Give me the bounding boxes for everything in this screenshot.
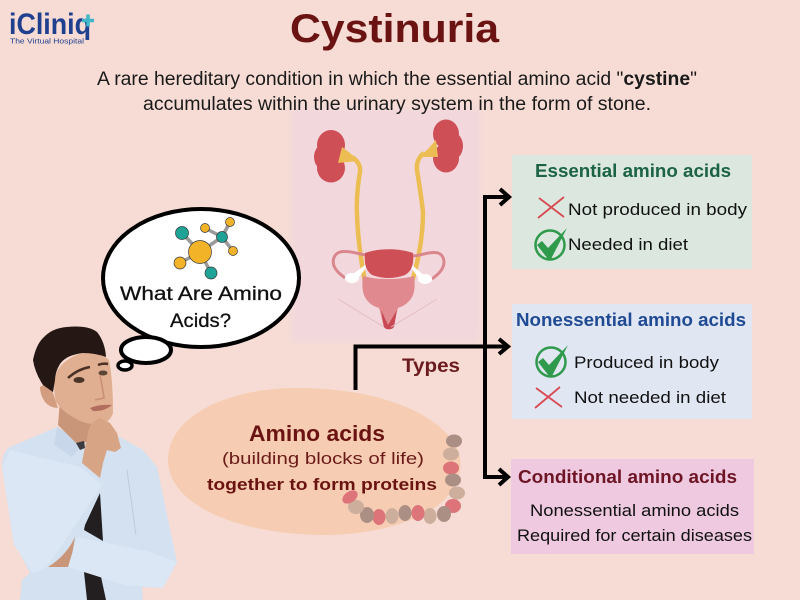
panel: urinary system illustration <box>292 108 480 342</box>
neck <box>58 400 104 447</box>
icon: check <box>536 345 568 376</box>
panel: essential amino acids: Essential amino acids <box>535 161 731 181</box>
raised forearm <box>2 450 102 573</box>
icon: check <box>536 228 567 260</box>
icon: cross <box>538 197 564 218</box>
eyes and brows <box>68 364 112 411</box>
bladder <box>365 249 413 278</box>
arrows: types connectors <box>356 189 509 485</box>
uterus <box>362 276 415 329</box>
panel: nonessential amino acids <box>512 304 752 419</box>
hair <box>33 327 106 392</box>
icon: amino acid chain <box>340 434 465 525</box>
panel: amino acids ellipse: Amino acids <box>249 421 385 446</box>
thought bubble: What Are Amino <box>120 284 282 305</box>
ureters <box>338 140 438 282</box>
lower forearm <box>68 537 177 588</box>
panel: nonessential amino acids: Not needed in diet <box>574 388 726 407</box>
title: Cystinuria <box>290 7 500 51</box>
panel: conditional amino acids <box>511 459 754 554</box>
panel: essential amino acids: Not produced in body <box>568 200 748 219</box>
ear <box>40 385 58 408</box>
intro text: accumulates within the urinary system in the form of stone. <box>143 94 651 115</box>
tie <box>84 493 106 600</box>
icon: cross <box>535 387 562 408</box>
fallopian tubes <box>333 251 444 279</box>
intro text: A rare hereditary condition in which the essential amino acid " cystine" <box>97 69 697 90</box>
hidden hand under arm <box>48 537 75 567</box>
logo: iCliniq: The Virtual Hospital <box>10 36 84 46</box>
intro text <box>97 69 697 115</box>
icon: molecule <box>174 218 238 279</box>
icon: right kidney <box>433 120 463 172</box>
panel: nonessential amino acids: Produced in body <box>574 353 720 372</box>
face <box>54 353 113 424</box>
panel: essential amino acids: Needed in diet <box>568 235 688 254</box>
label: types: Types <box>402 356 460 377</box>
panel: amino acids ellipse: (building blocks of life) <box>222 449 424 468</box>
icon: left kidney <box>314 130 345 182</box>
panel: amino acids ellipse: together to form proteins <box>207 475 437 494</box>
panel: conditional amino acids: Conditional amino acids <box>518 467 737 487</box>
shirt <box>2 427 177 600</box>
man thinking <box>2 327 177 600</box>
thought bubble: Acids? <box>170 311 231 332</box>
panel: conditional amino acids: Required for certain diseases <box>517 526 752 545</box>
panel: amino acids ellipse <box>168 388 460 535</box>
logo: iCliniq: iCliniq <box>9 8 91 41</box>
ovaries <box>345 265 432 284</box>
panel: nonessential amino acids: Nonessential amino acids <box>516 310 746 330</box>
panel: conditional amino acids: Nonessential amino acids <box>530 501 739 520</box>
thought bubble <box>103 209 299 370</box>
hand <box>82 418 121 478</box>
panel: essential amino acids <box>512 155 752 269</box>
